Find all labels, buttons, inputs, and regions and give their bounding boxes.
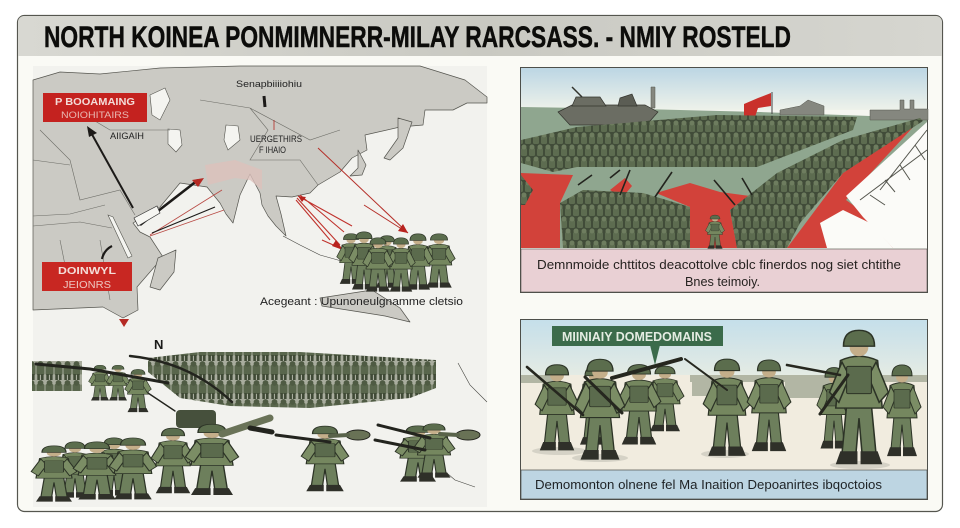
label: red callout bottom: JEIONRS <box>63 280 111 291</box>
north marker: N <box>154 337 163 352</box>
lone soldier <box>706 215 724 249</box>
white coast <box>846 122 927 248</box>
white coast lump <box>820 210 893 248</box>
soldiers <box>535 330 921 464</box>
panel: troop formation <box>520 68 928 292</box>
map text labels: UERGETHIRS <box>250 134 302 145</box>
advance arrows <box>578 170 752 205</box>
crowd: lower left <box>560 190 690 248</box>
contested border zone <box>205 160 262 190</box>
panel: regional map <box>31 66 928 507</box>
distant troop line <box>521 375 927 398</box>
green label <box>552 326 723 365</box>
title bar <box>18 16 942 56</box>
map text labels: Acegeant : Upunoneulgnamme cletsio <box>260 296 463 308</box>
rifles across back rows <box>36 356 232 411</box>
scene sky <box>521 68 927 110</box>
scene sky <box>521 320 927 375</box>
flag <box>744 92 772 117</box>
crowd: upper formation <box>521 115 857 172</box>
crowd: right column <box>730 118 923 248</box>
caption band <box>521 470 927 499</box>
label: red callout bottom <box>42 262 132 291</box>
map text labels: F IHAIO <box>259 145 286 156</box>
tank <box>558 87 658 125</box>
soldiers group on map <box>337 232 455 292</box>
launchers <box>222 418 480 450</box>
inland seas <box>108 88 240 258</box>
map land masses <box>33 66 487 322</box>
fence hatching <box>860 130 927 205</box>
red territory <box>521 125 915 248</box>
arrows on map <box>87 96 408 327</box>
ground shadows <box>532 447 890 469</box>
caption band: Demomonton olnene fel Ma Inaition Depoanirtes ibqoctoios <box>535 477 883 492</box>
scene ground <box>521 107 927 248</box>
crowd: far left <box>521 175 533 205</box>
caption band <box>521 249 927 292</box>
caption band: Bnes teimoiy. <box>685 274 760 289</box>
label: red callout top: NOIOHITAIRS <box>61 110 129 120</box>
back rows of troops <box>32 352 436 412</box>
green label: MIINIAIY DOMEDOMAINS <box>562 329 712 344</box>
caption band: Demnmoide chttitos deacottolve cblc finerdos nog siet chtithe <box>537 257 901 272</box>
label: red callout bottom: DOINWYL <box>58 266 116 277</box>
border lines <box>33 100 487 487</box>
distant buildings <box>651 87 928 120</box>
label: red callout top <box>43 93 147 122</box>
rifles <box>527 359 848 415</box>
map text labels <box>110 79 463 308</box>
panel: infantry demonstrations <box>520 320 928 500</box>
label: red callout top: P BOOAMAING <box>55 97 135 108</box>
map text labels: AIIGAIH <box>110 131 144 142</box>
foreground troops <box>31 410 455 502</box>
map text labels: Senapbiiiiohiu <box>236 79 302 90</box>
